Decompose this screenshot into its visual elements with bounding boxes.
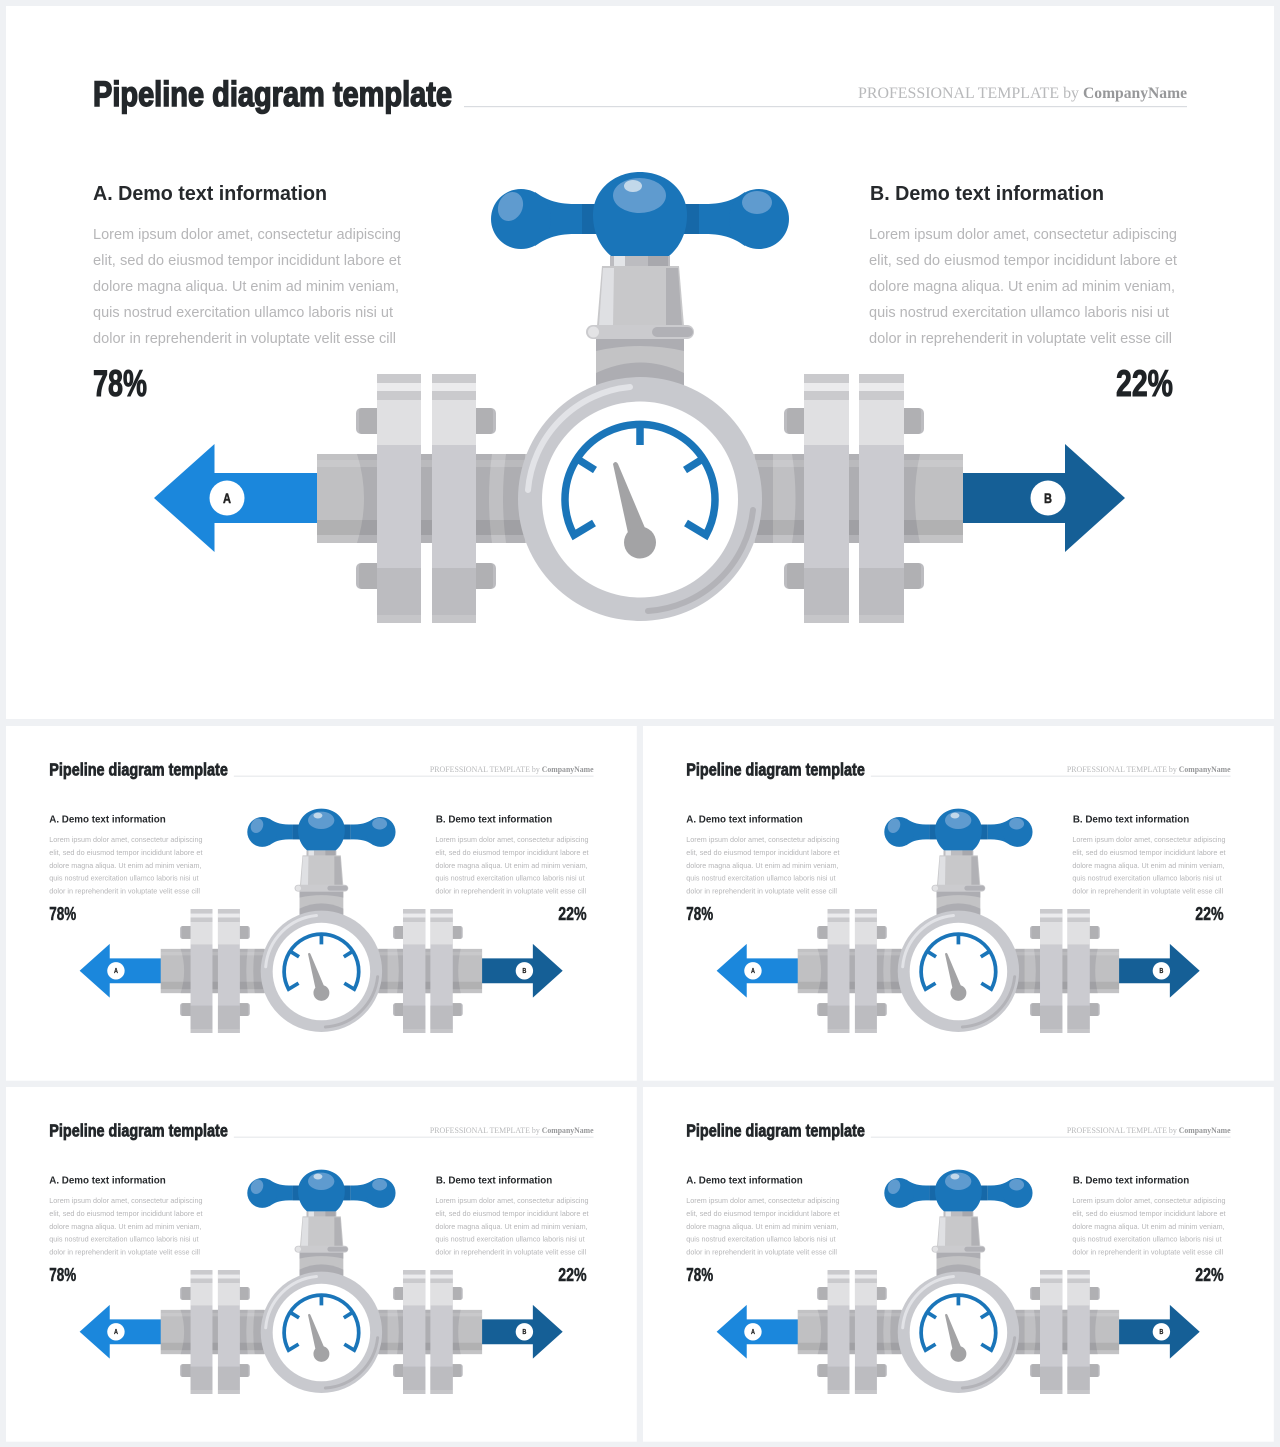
text block B: dolor in reprehenderit in voluptate velit esse cill (1072, 887, 1223, 896)
title: Pipeline diagram template (49, 1121, 228, 1141)
subtitle: CompanyName (542, 765, 594, 774)
pipeline diagram (717, 1170, 1200, 1394)
badge A: A (751, 1329, 755, 1336)
valve handle (491, 172, 789, 256)
text block B: dolor in reprehenderit in voluptate velit esse cill (435, 887, 586, 896)
text block A: dolore magna aliqua. Ut enim ad minim veniam, (686, 1222, 839, 1231)
badge B (516, 1323, 533, 1340)
text block A: quis nostrud exercitation ullamco laboris nisi ut (686, 874, 836, 883)
text block B: elit, sed do eiusmod tempor incididunt labore et (869, 252, 1178, 269)
text block A: quis nostrud exercitation ullamco laboris nisi ut (49, 874, 199, 883)
text block B: elit, sed do eiusmod tempor incididunt labore et (435, 848, 589, 857)
text block B: dolor in reprehenderit in voluptate velit esse cill (869, 330, 1172, 347)
badge B: B (1159, 968, 1163, 975)
pressure gauge (518, 377, 762, 621)
text block B: quis nostrud exercitation ullamco laboris nisi ut (869, 304, 1170, 321)
valve stem (586, 256, 694, 386)
subtitle: PROFESSIONAL TEMPLATE by (858, 85, 1079, 102)
badge B: B (522, 1329, 526, 1336)
pipeline diagram (80, 1170, 563, 1394)
text block B: B. Demo text information (870, 183, 1104, 205)
subtitle: CompanyName (1179, 765, 1231, 774)
text block A (686, 815, 840, 896)
subtitle: PROFESSIONAL TEMPLATE by (1067, 765, 1177, 774)
text block A: Lorem ipsum dolor amet, consectetur adipiscing (686, 835, 840, 844)
arrow A (154, 444, 318, 552)
subtitle: CompanyName (1083, 85, 1187, 102)
text block A: elit, sed do eiusmod tempor incididunt labore et (686, 1209, 840, 1218)
badge B (516, 962, 533, 979)
text block B: B. Demo text information (436, 815, 552, 826)
text block B: quis nostrud exercitation ullamco laboris nisi ut (1072, 874, 1222, 883)
badge B: B (522, 968, 526, 975)
panel: small slide bottom right (643, 1087, 1274, 1442)
text block B: quis nostrud exercitation ullamco laboris nisi ut (435, 1235, 585, 1244)
subtitle (430, 1126, 594, 1135)
subtitle: CompanyName (1179, 1126, 1231, 1135)
badge A: A (751, 968, 755, 975)
text block A: quis nostrud exercitation ullamco laboris nisi ut (49, 1235, 199, 1244)
horizontal pipe (317, 454, 963, 543)
pipeline diagram (717, 809, 1200, 1033)
percentage B: 22% (558, 1264, 587, 1285)
text block B (435, 815, 589, 896)
text block B: dolore magna aliqua. Ut enim ad minim veniam, (869, 278, 1175, 295)
text block B: quis nostrud exercitation ullamco laboris nisi ut (435, 874, 585, 883)
badge A (107, 962, 125, 979)
subtitle: PROFESSIONAL TEMPLATE by (430, 1126, 540, 1135)
text block A: elit, sed do eiusmod tempor incididunt labore et (93, 252, 402, 269)
text block A (49, 1176, 203, 1257)
percentage A: 78% (49, 903, 76, 924)
text block B (1072, 815, 1226, 896)
text block A: dolor in reprehenderit in voluptate velit esse cill (49, 887, 200, 896)
panel: small slide top right (643, 726, 1274, 1081)
text block A: A. Demo text information (686, 1176, 803, 1187)
panel: small slide bottom left (6, 1087, 637, 1442)
text block A: A. Demo text information (93, 183, 327, 205)
text block B: B. Demo text information (1073, 1176, 1189, 1187)
text block B (435, 1176, 589, 1257)
text block A: A. Demo text information (49, 815, 166, 826)
text block A: quis nostrud exercitation ullamco laboris nisi ut (93, 304, 394, 321)
badge B: B (1044, 490, 1052, 506)
panel: small slide top left (6, 726, 637, 1081)
flange: left outer (377, 374, 421, 623)
badge A (210, 480, 244, 516)
subtitle (858, 85, 1187, 102)
bolts (356, 408, 924, 589)
panel: main slide (6, 6, 1274, 719)
text block B (869, 183, 1178, 347)
text block B: B. Demo text information (436, 1176, 552, 1187)
text block A: elit, sed do eiusmod tempor incididunt labore et (49, 1209, 203, 1218)
percentage B: 22% (1116, 363, 1173, 404)
title: Pipeline diagram template (686, 760, 865, 780)
badge A: A (114, 1329, 118, 1336)
subtitle: PROFESSIONAL TEMPLATE by (1067, 1126, 1177, 1135)
text block B: B. Demo text information (1073, 815, 1189, 826)
text block B: dolore magna aliqua. Ut enim ad minim veniam, (1072, 861, 1225, 870)
text block A (93, 183, 402, 347)
pipeline diagram (154, 172, 1125, 623)
text block A: quis nostrud exercitation ullamco laboris nisi ut (686, 1235, 836, 1244)
percentage A: 78% (686, 1264, 713, 1285)
percentage B: 22% (1195, 903, 1224, 924)
text block A: Lorem ipsum dolor amet, consectetur adipiscing (93, 226, 401, 243)
percentage A: 78% (686, 903, 713, 924)
badge A: A (223, 490, 231, 506)
text block A: elit, sed do eiusmod tempor incididunt labore et (49, 848, 203, 857)
text block A: dolor in reprehenderit in voluptate velit esse cill (49, 1248, 200, 1257)
subtitle (430, 765, 594, 774)
percentage B: 22% (1195, 1264, 1224, 1285)
text block B: quis nostrud exercitation ullamco laboris nisi ut (1072, 1235, 1222, 1244)
text block A: dolore magna aliqua. Ut enim ad minim veniam, (49, 1222, 202, 1231)
text block A: Lorem ipsum dolor amet, consectetur adipiscing (686, 1196, 840, 1205)
subtitle: PROFESSIONAL TEMPLATE by (430, 765, 540, 774)
percentage B: 22% (558, 903, 587, 924)
title: Pipeline diagram template (686, 1121, 865, 1141)
text block A (686, 1176, 840, 1257)
flange: left inner (432, 374, 476, 623)
title: Pipeline diagram template (49, 760, 228, 780)
badge B (1153, 1323, 1170, 1340)
text block B: dolor in reprehenderit in voluptate velit esse cill (435, 1248, 586, 1257)
text block A: dolor in reprehenderit in voluptate velit esse cill (686, 1248, 837, 1257)
badge A (744, 962, 762, 979)
pipeline diagram (80, 809, 563, 1033)
percentage A: 78% (49, 1264, 76, 1285)
subtitle (1067, 1126, 1231, 1135)
text block B: dolor in reprehenderit in voluptate velit esse cill (1072, 1248, 1223, 1257)
text block A: dolore magna aliqua. Ut enim ad minim veniam, (686, 861, 839, 870)
badge A (744, 1323, 762, 1340)
flange: right inner (804, 374, 849, 623)
text block B: Lorem ipsum dolor amet, consectetur adipiscing (869, 226, 1177, 243)
arrow B (962, 444, 1125, 552)
text block B: Lorem ipsum dolor amet, consectetur adipiscing (435, 835, 589, 844)
text block B (1072, 1176, 1226, 1257)
text block B: elit, sed do eiusmod tempor incididunt labore et (1072, 848, 1226, 857)
percentage A: 78% (93, 363, 147, 404)
text block B: dolore magna aliqua. Ut enim ad minim veniam, (1072, 1222, 1225, 1231)
text block A: dolore magna aliqua. Ut enim ad minim veniam, (49, 861, 202, 870)
subtitle: CompanyName (542, 1126, 594, 1135)
text block A: dolore magna aliqua. Ut enim ad minim veniam, (93, 278, 399, 295)
badge B (1153, 962, 1170, 979)
text block B: elit, sed do eiusmod tempor incididunt labore et (1072, 1209, 1226, 1218)
flange: right outer (859, 374, 904, 623)
title: Pipeline diagram template (93, 75, 452, 114)
text block A: Lorem ipsum dolor amet, consectetur adipiscing (49, 835, 203, 844)
text block A: A. Demo text information (49, 1176, 166, 1187)
text block B: Lorem ipsum dolor amet, consectetur adipiscing (435, 1196, 589, 1205)
text block B: Lorem ipsum dolor amet, consectetur adipiscing (1072, 835, 1226, 844)
text block A: elit, sed do eiusmod tempor incididunt labore et (686, 848, 840, 857)
text block B: dolore magna aliqua. Ut enim ad minim veniam, (435, 1222, 588, 1231)
text block B: elit, sed do eiusmod tempor incididunt labore et (435, 1209, 589, 1218)
text block B: Lorem ipsum dolor amet, consectetur adipiscing (1072, 1196, 1226, 1205)
text block A: A. Demo text information (686, 815, 803, 826)
text block B: dolore magna aliqua. Ut enim ad minim veniam, (435, 861, 588, 870)
badge A (107, 1323, 125, 1340)
text block A (49, 815, 203, 896)
text block A: Lorem ipsum dolor amet, consectetur adipiscing (49, 1196, 203, 1205)
text block A: dolor in reprehenderit in voluptate velit esse cill (93, 330, 396, 347)
badge B (1030, 480, 1066, 516)
badge B: B (1159, 1329, 1163, 1336)
text block A: dolor in reprehenderit in voluptate velit esse cill (686, 887, 837, 896)
subtitle (1067, 765, 1231, 774)
badge A: A (114, 968, 118, 975)
